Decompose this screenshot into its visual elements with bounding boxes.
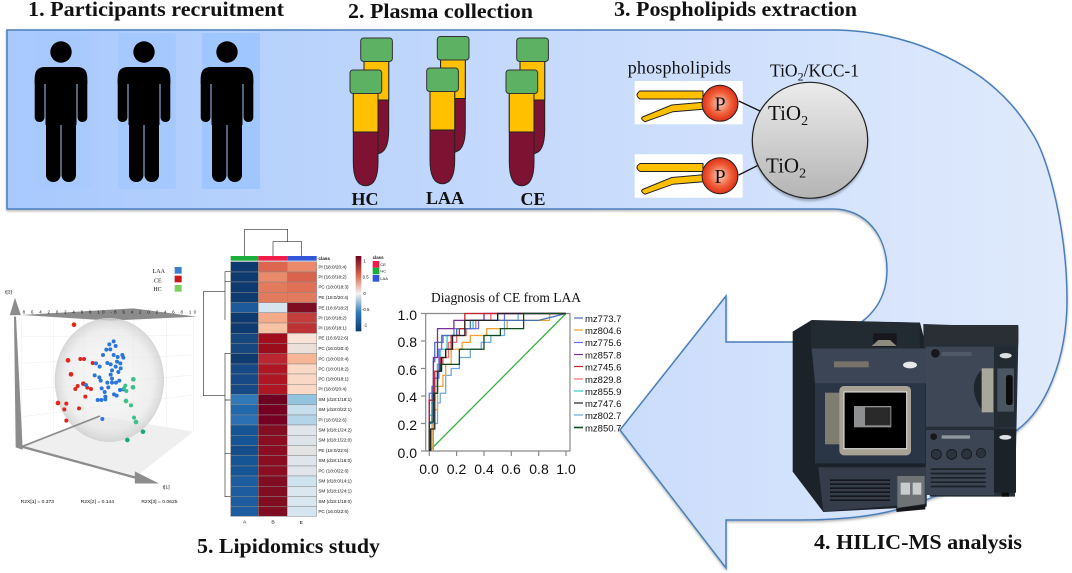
plasma tubes [350,36,548,209]
PCA legend [153,267,182,293]
ROC axis labels: 0.2 [398,417,417,433]
heatmap row labels: PC (18:0/18:1) [318,377,349,382]
heatmap column labels [243,519,304,526]
heatmap row labels: PI (18:0/18:2) [318,315,347,320]
phospholipid extraction diagram: P [714,166,726,188]
heatmap colour scale: 0 [363,291,366,296]
PCA axis labels and R2X values: t[1] [163,485,170,491]
PCA axis labels and R2X values: 8 6 4 2 0 2 4 6 8 10 -8 6 4 2 0 2 4 6 8 10 [23,309,197,314]
ROC curves [429,314,566,451]
ROC legend: mz802.7 [585,411,621,422]
phospholipid extraction diagram [628,57,868,201]
phospholipid extraction diagram: TiO [768,101,801,125]
heatmap column labels: E [300,520,304,526]
ROC legend: mz747.6 [585,399,621,410]
phospholipid extraction diagram: TiO [766,154,799,178]
heatmap colour scale: -1 [363,323,368,328]
ROC legend: mz855.9 [585,387,621,398]
heatmap class legend: HC [380,269,386,274]
LC-MS instrument [793,320,1018,512]
PCA floor and ceiling [22,308,197,476]
heatmap colour scale: 1 [363,259,366,264]
title: step 4: 4. HILIC-MS analysis [814,530,1022,554]
heatmap row labels: PI (18:0/22:6) [318,417,347,422]
heatmap class legend: LAA [380,276,388,281]
phospholipid extraction diagram: /KCC-1 [804,61,859,81]
phospholipid extraction diagram: P [714,94,726,116]
PCA axis labels and R2X values: t[3] [5,289,13,295]
heatmap row labels: PC (18:0/18:3) [318,285,349,290]
plasma tubes: HC [352,189,378,209]
heatmap row labels: PE (16:0/22:6) [318,336,349,341]
ROC axis labels: 1.0 [556,461,576,477]
heatmap class bar [231,256,317,261]
heatmap cells [231,262,317,516]
ROC legend [574,314,621,434]
plasma tubes: LAA [426,188,464,208]
heatmap row labels: PC (18:0/20:4) [318,356,349,361]
PCA axis labels and R2X values [5,289,197,505]
heatmap row labels: PI (18:0/20:4) [318,387,347,392]
heatmap class legend: CE [380,262,386,267]
ROC axis labels: 0.0 [398,445,417,461]
heatmap row labels: SM (d18:1/22:0) [318,438,352,443]
heatmap row labels: PC (16:0/22:6) [318,509,349,514]
PCA legend: HC [153,287,162,293]
ROC legend: mz775.6 [585,338,621,349]
heatmap [203,229,388,526]
phospholipid extraction diagram: phospholipids [628,57,731,77]
heatmap row labels: PI (16:0/18:2) [318,275,347,280]
ROC axis labels: 0.0 [419,461,439,477]
ROC chart [398,290,621,477]
ROC axis labels: 0.2 [447,461,466,477]
title: step 5: 5. Lipidomics study [197,534,381,558]
PCA points: CE [56,322,95,423]
heatmap row labels: class [318,256,330,261]
heatmap row labels: SM (d18:1/18:1) [318,397,352,402]
ROC axis labels: 0.6 [501,461,521,477]
heatmap column labels: A [243,519,247,525]
heatmap colour scale [356,256,370,331]
ROC legend: mz829.8 [585,375,621,386]
heatmap row labels: SM (d18:1/16:0) [318,458,352,463]
ROC axis labels: 0.4 [474,461,494,477]
PCA axis labels and R2X values: R2X[1] = 0.373 [21,499,54,505]
PCA points: LAA [84,339,125,421]
heatmap column labels: B [271,519,275,525]
ROC legend: mz804.6 [585,326,621,337]
heatmap row labels: PI (18:0/18:1) [318,326,347,331]
ROC axis labels: 1.0 [398,307,417,323]
PCA legend: LAA [153,269,166,275]
ROC axis labels: 0.8 [398,334,417,350]
PCA axes [10,298,158,483]
ROC legend: mz850.7 [585,424,621,434]
ROC title: Diagnosis of CE from LAA [431,290,581,305]
PCA axis labels and R2X values: R2X[2] = 0.144 [81,499,114,505]
heatmap row labels: SM (d18:1/24:1) [318,489,352,494]
ROC legend: mz773.7 [585,314,621,325]
ROC axis labels: 0.6 [398,362,417,378]
heatmap row labels: SM (d18:0/22:1) [318,407,352,412]
heatmap row labels [318,256,352,514]
3D PCA score plot [5,267,197,505]
PCA axis labels and R2X values: R2X[3] = 0.0625 [141,499,178,505]
heatmap class legend: class [373,255,384,260]
heatmap dendrograms [203,229,302,497]
plasma tubes: CE [520,189,546,209]
heatmap row labels: SM (d18:0/14:1) [318,478,352,483]
heatmap row labels: SM (d18:1/24:2) [318,428,352,433]
ROC plot frame [421,314,570,456]
PCA legend: CE [154,278,162,284]
PCA sphere [55,318,164,442]
phospholipid extraction diagram: 2 [799,167,806,182]
heatmap row labels: PC (18:0/18:2) [318,366,349,371]
PCA grid walls [22,310,193,447]
ROC axis labels: 0.8 [529,461,549,477]
participants icons [35,33,260,189]
heatmap row labels: SM (d18:1/18:0) [318,499,352,504]
heatmap row labels: PI (18:0/20:4) [318,264,347,269]
heatmap colour scale: 0.5 [363,274,369,279]
phospholipid extraction diagram: TiO [770,61,798,81]
heatmap row labels: PC (16:0/20:4) [318,346,349,351]
heatmap class legend [373,255,388,282]
PCA points: HC [122,377,145,442]
heatmap row labels: PE (18:0/22:6) [318,448,349,453]
phospholipid extraction diagram: 2 [798,70,804,84]
heatmap row labels: PC (18:0/22:6) [318,468,349,473]
ROC legend: mz857.8 [585,350,621,362]
ROC axis labels: 0.4 [398,389,417,405]
phospholipid extraction diagram: 2 [801,114,808,129]
heatmap row labels: PE (18:0/18:2) [318,305,349,310]
heatmap row labels: PE (18:0/20:4) [318,295,349,300]
ROC legend: mz745.6 [585,362,621,374]
heatmap colour scale: -0.5 [362,307,370,312]
ROC axis labels [398,307,576,477]
